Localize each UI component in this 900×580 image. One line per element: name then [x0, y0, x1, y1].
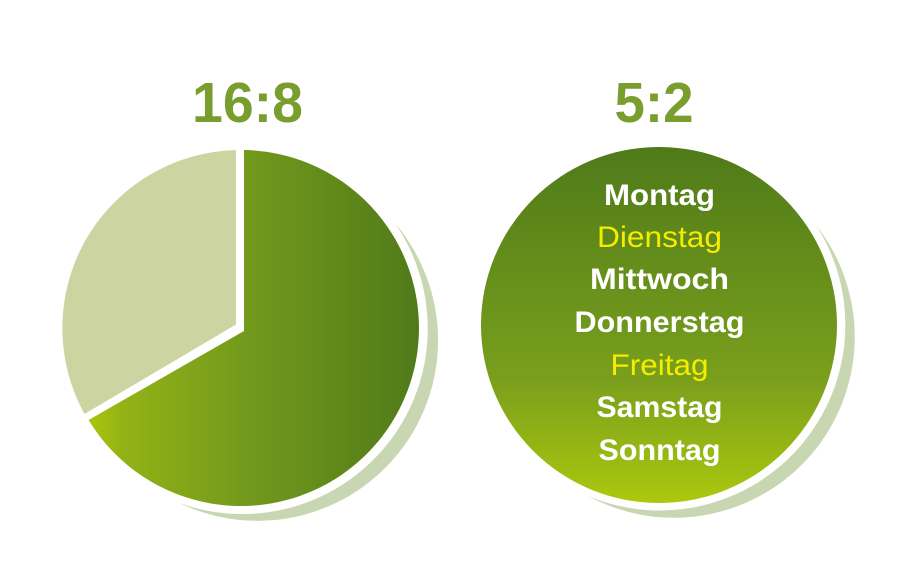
panel: 16:8 pie chart	[62, 71, 438, 521]
heading: 16:8: 16:8	[192, 71, 303, 135]
weekday list	[574, 179, 744, 467]
label: Sonntag: Sonntag	[598, 434, 720, 467]
label: Montag: Montag	[604, 179, 715, 212]
light wedge: 8 hours	[62, 150, 236, 414]
label: Dienstag: Dienstag	[597, 221, 722, 254]
label: Freitag: Freitag	[610, 349, 708, 382]
label: Samstag: Samstag	[596, 391, 722, 424]
label: Donnerstag: Donnerstag	[574, 306, 744, 339]
shadow crescent	[588, 226, 855, 518]
heading: 5:2: 5:2	[614, 71, 694, 135]
label: Mittwoch: Mittwoch	[590, 263, 729, 296]
panel: 5:2 weekday circle	[481, 71, 855, 518]
green wedge: 16 hours	[89, 150, 419, 506]
shadow crescent	[180, 223, 438, 521]
green circle	[481, 147, 837, 503]
